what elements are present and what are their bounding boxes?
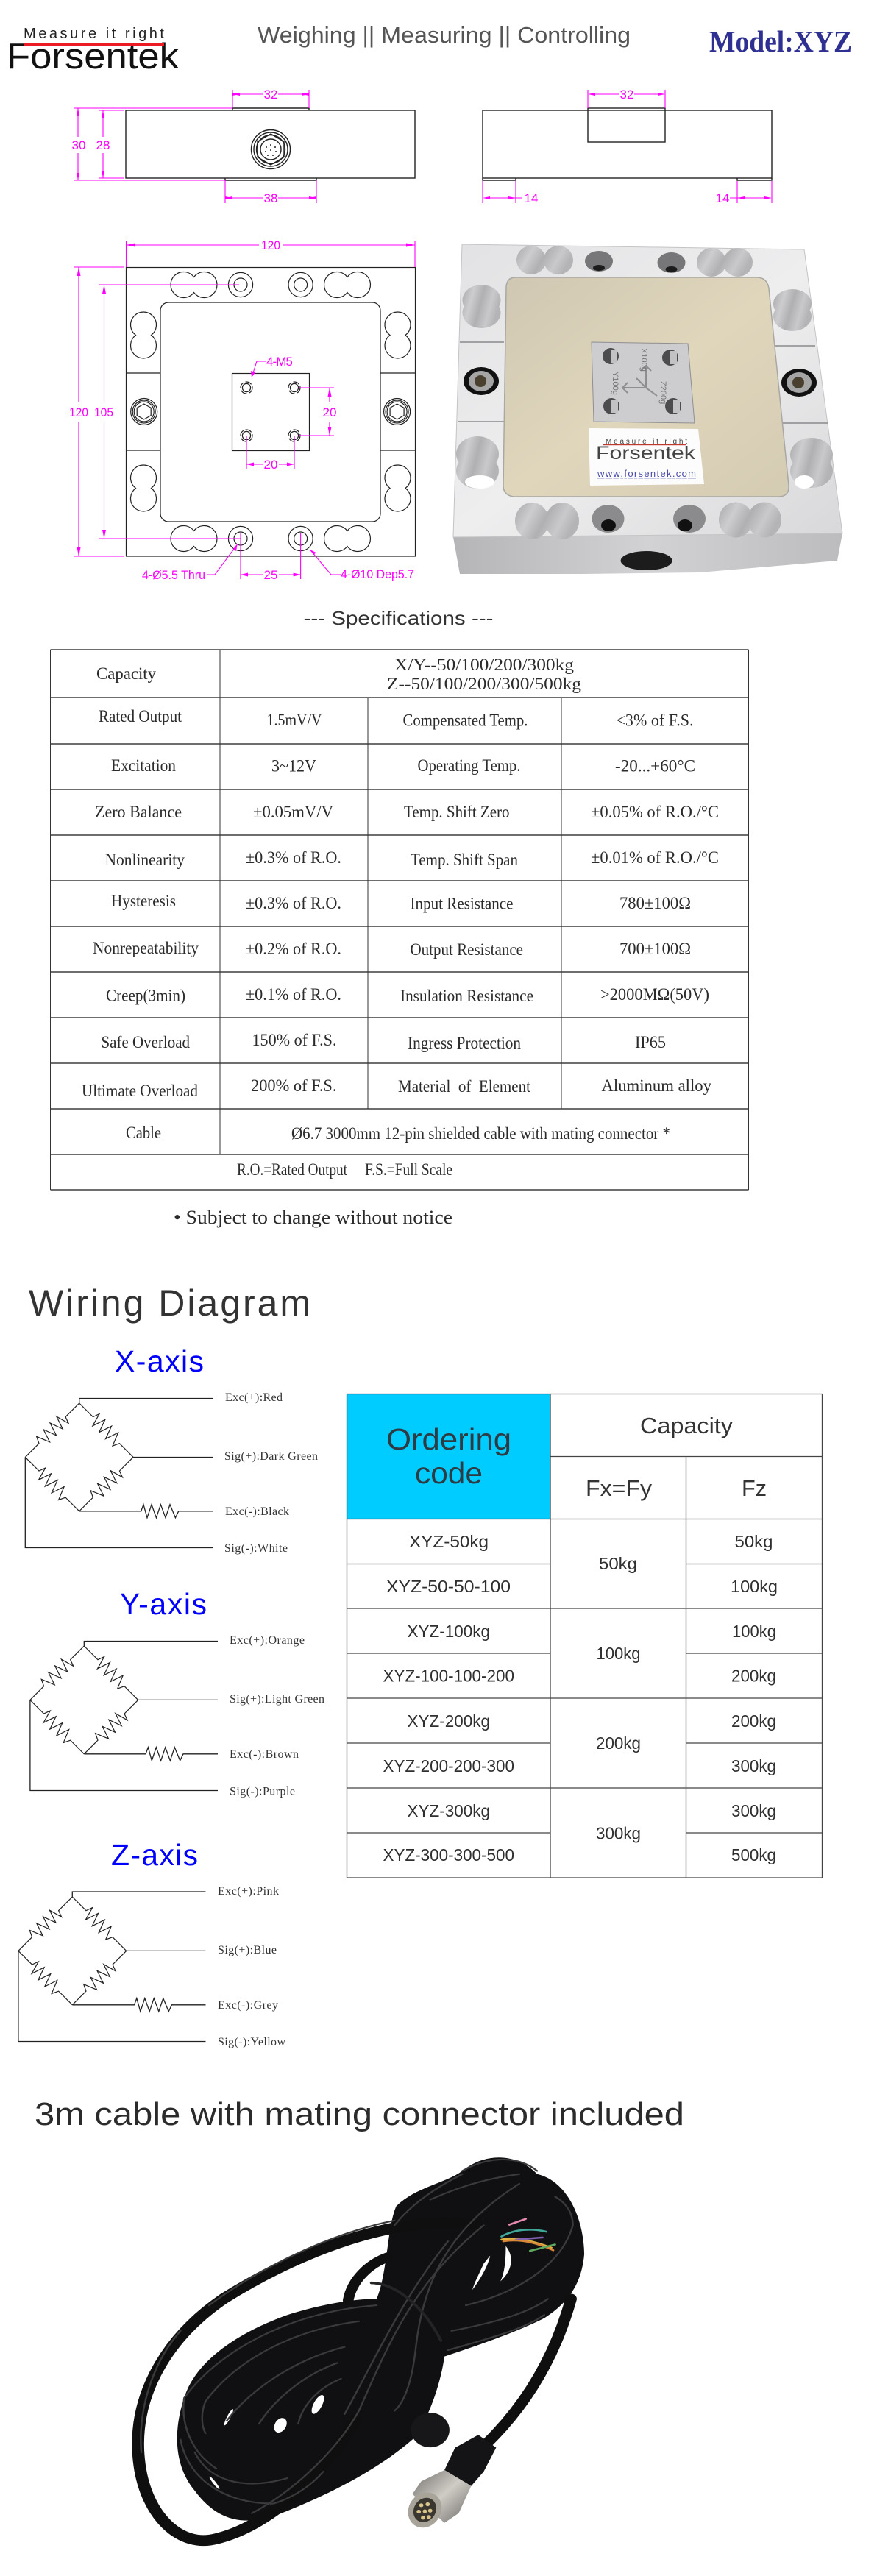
- row: rated output: 1.5mV/V: [266, 711, 322, 729]
- M5 threaded holes: [241, 382, 300, 441]
- Z-axis wire labels: Sig(-):Yellow: [218, 2036, 285, 2048]
- column: Fz: 200kg: [731, 1711, 776, 1731]
- column: ordering codes: [383, 1532, 514, 1864]
- photo: center plate: [592, 342, 695, 423]
- row: hysteresis: Hysteresis: [111, 892, 176, 910]
- row: safe overload: Safe Overload: [102, 1033, 190, 1051]
- specifications table: [50, 650, 749, 1190]
- Z-axis wire labels: Sig(+):Blue: [218, 1944, 277, 1956]
- dimensions: plan view: 120: [69, 405, 88, 419]
- photo: brand sticker: [589, 428, 704, 486]
- row: nonlinearity: Temp. Shift Span: [411, 851, 518, 869]
- cable photo: [138, 2157, 584, 2541]
- row: ultimate overload: Material of Element: [398, 1077, 531, 1096]
- photo: threaded holes and screws: [464, 251, 817, 533]
- column: Fz: 300kg: [731, 1801, 776, 1820]
- photo: center plate: Z200g: [658, 381, 667, 404]
- row: hysteresis: 780±100Ω: [619, 894, 691, 912]
- connector with dust cap: [402, 2413, 496, 2532]
- row: capacity: [96, 656, 582, 693]
- dimensions: plan view: 25: [264, 568, 277, 582]
- row: nonrepeatability: 700±100Ω: [619, 940, 691, 958]
- column: Fz: [731, 1532, 778, 1864]
- dimensions: plan view: [69, 238, 415, 582]
- row: ultimate overload: Ultimate Overload: [82, 1082, 198, 1100]
- Y-axis wire labels: Exc(-):Brown: [230, 1748, 299, 1761]
- table grid: [347, 1394, 823, 1878]
- column: Fz: 500kg: [731, 1845, 776, 1864]
- row: ultimate overload: 200% of F.S.: [251, 1076, 337, 1095]
- Z-axis wire labels: Exc(+):Pink: [218, 1885, 279, 1898]
- row: rated output: <3% of F.S.: [617, 711, 693, 730]
- row: excitation: Excitation: [111, 756, 176, 775]
- socket head screws: [131, 399, 411, 425]
- side view drawing: front: [72, 88, 415, 205]
- Y-axis wire labels: Sig(+):Light Green: [230, 1693, 324, 1706]
- row: rated output: Compensated Temp.: [403, 711, 528, 730]
- wiring: Z-axis: Z-axis: [111, 1838, 198, 1872]
- dimensions: plan view: 4-Ø10 Dep5.7: [341, 567, 414, 581]
- row: nonrepeatability: ±0.2% of R.O.: [246, 940, 341, 958]
- row: zero balance: Temp. Shift Zero: [404, 803, 509, 821]
- mounting lobes: [131, 272, 411, 552]
- row: cable: [126, 1124, 670, 1143]
- ordering code table: [347, 1394, 823, 1878]
- dimensions: front view: [74, 90, 316, 203]
- row: excitation: -20...+60°C: [615, 756, 695, 776]
- row: zero balance: [95, 803, 719, 821]
- photo: lobes: [456, 246, 833, 539]
- side view drawing: rear: [483, 88, 772, 205]
- side view drawing: front: 32: [264, 88, 277, 102]
- row: abbreviations: F.S.=Full Scale: [365, 1160, 452, 1179]
- row: creep: >2000MΩ(50V): [600, 985, 709, 1004]
- X-axis wire labels: Sig(+):Dark Green: [224, 1450, 318, 1463]
- row: creep: [106, 985, 709, 1005]
- row: safe overload: 150% of F.S.: [252, 1031, 337, 1049]
- side view drawing: front: 38: [264, 191, 277, 205]
- footnote: • Subject to change without notice: [174, 1207, 452, 1228]
- row: safe overload: IP65: [635, 1033, 666, 1051]
- column: Fz: 300kg: [731, 1756, 776, 1775]
- header cells: capacity: [586, 1413, 767, 1501]
- dimensions: plan view: 105: [94, 405, 113, 419]
- dimensions: rear view: [483, 90, 772, 203]
- cable strands: [138, 2223, 571, 2541]
- row: cable: Ø6.7 3000mm 12-pin shielded cable with mating connector *: [291, 1124, 670, 1143]
- column: ordering codes: XYZ-100kg: [408, 1622, 490, 1641]
- row: hysteresis: Input Resistance: [411, 895, 514, 912]
- photo: cable socket: [621, 551, 672, 570]
- product photo: load cell: [453, 244, 842, 574]
- wiring: X-axis: X-axis: [115, 1344, 204, 1378]
- row: zero balance: ±0.05mV/V: [253, 803, 333, 821]
- row: zero balance: ±0.05% of R.O./°C: [591, 803, 719, 821]
- row: safe overload: [102, 1031, 666, 1052]
- wiring: Y-axis: Y-axis: [120, 1587, 207, 1621]
- column: Fx=Fy: 300kg: [596, 1823, 641, 1842]
- row: abbreviations: [237, 1160, 452, 1179]
- header cell: ordering code: [347, 1394, 550, 1519]
- row: ultimate overload: [82, 1076, 711, 1100]
- Y-axis wire labels: Sig(-):Purple: [230, 1785, 295, 1798]
- row: nonlinearity: Nonlinearity: [104, 851, 185, 869]
- cable section heading: 3m cable with mating connector included: [35, 2096, 684, 2132]
- row: excitation: [111, 756, 695, 776]
- row: ultimate overload: Aluminum alloy: [602, 1076, 711, 1095]
- column: Fz: 100kg: [731, 1577, 778, 1596]
- Y-axis wire labels: [230, 1634, 324, 1798]
- row: nonlinearity: ±0.3% of R.O.: [246, 848, 341, 867]
- column: ordering codes: XYZ-50kg: [409, 1532, 489, 1551]
- header cells: capacity: Fx=Fy: [586, 1475, 653, 1501]
- row: creep: Creep(3min): [106, 986, 185, 1005]
- row: hysteresis: ±0.3% of R.O.: [246, 894, 341, 912]
- wiring: Y-axis: [26, 1587, 324, 1798]
- wiring diagram heading: Wiring Diagram: [29, 1282, 310, 1324]
- row: capacity: X/Y--50/100/200/300kg: [394, 656, 575, 674]
- row: nonrepeatability: Output Resistance: [411, 940, 523, 959]
- specifications heading: --- Specifications ---: [303, 607, 493, 629]
- header cells: capacity: Fz: [742, 1475, 767, 1501]
- photo: tan top plate: [503, 277, 789, 497]
- cable gaps: [208, 2246, 511, 2490]
- column: ordering codes: XYZ-50-50-100: [386, 1577, 511, 1596]
- X-axis wire labels: [224, 1391, 318, 1555]
- dimensions: plan view: 120: [261, 238, 280, 252]
- column: Fz: 200kg: [731, 1666, 776, 1685]
- side view drawing: rear: 14: [525, 191, 538, 205]
- row: creep: ±0.1% of R.O.: [246, 985, 341, 1004]
- dimensions: plan view: 20: [323, 405, 336, 419]
- wiring: X-axis: [21, 1344, 318, 1555]
- header cells: capacity: Capacity: [640, 1413, 734, 1438]
- wiring: Z-axis: [14, 1838, 285, 2048]
- side view drawing: rear: 32: [620, 88, 633, 102]
- column: ordering codes: XYZ-100-100-200: [383, 1666, 514, 1685]
- column: ordering codes: XYZ-300-300-500: [383, 1845, 514, 1864]
- column: ordering codes: XYZ-200-200-300: [383, 1756, 514, 1775]
- row: hysteresis: [111, 892, 691, 912]
- side view drawing: front: 30: [72, 138, 85, 152]
- column: Fz: 100kg: [732, 1622, 776, 1641]
- photo: brand sticker: Measure it right: [606, 438, 687, 446]
- plan view drawing: [69, 238, 415, 582]
- photo: brand sticker: Forsentek: [596, 443, 696, 464]
- row: capacity: Z--50/100/200/300/500kg: [387, 675, 582, 693]
- header cell: ordering code: Ordering: [386, 1422, 511, 1456]
- row: safe overload: Ingress Protection: [408, 1034, 521, 1052]
- logo: Forsentek: Forsentek: [7, 37, 180, 77]
- row: nonlinearity: ±0.01% of R.O./°C: [591, 848, 719, 867]
- row: cable: Cable: [126, 1124, 161, 1142]
- side view drawing: rear: 14: [716, 191, 729, 205]
- X-axis wire labels: Exc(-):Black: [225, 1505, 289, 1518]
- photo: center plate: X100g: [639, 348, 648, 372]
- row: zero balance: Zero Balance: [95, 803, 182, 821]
- Z-axis bridge schematic: [14, 1892, 206, 2041]
- cable coil mass: [177, 2157, 584, 2521]
- row: abbreviations: R.O.=Rated Output: [237, 1160, 348, 1179]
- row: nonrepeatability: [93, 939, 691, 959]
- row: nonlinearity: [104, 848, 719, 869]
- photo: brand sticker: www.forsentek.com: [597, 468, 696, 479]
- model title: Model:XYZ: [709, 24, 852, 58]
- row: creep: Insulation Resistance: [400, 987, 533, 1005]
- tagline: Weighing || Measuring || Controlling: [258, 22, 631, 48]
- row: rated output: Rated Output: [99, 707, 182, 725]
- row: capacity: Capacity: [96, 664, 156, 683]
- column: Fx=Fy: [596, 1554, 641, 1842]
- Z-axis wire labels: [218, 1885, 285, 2048]
- body side and top faces: [453, 244, 842, 574]
- photo: center plate: Y100g: [611, 372, 619, 395]
- column: Fx=Fy: 100kg: [596, 1644, 640, 1663]
- row: nonrepeatability: Nonrepeatability: [93, 939, 199, 957]
- row: excitation: Operating Temp.: [418, 756, 521, 775]
- column: Fx=Fy: 50kg: [599, 1554, 637, 1573]
- X-axis wire labels: Sig(-):White: [224, 1542, 288, 1555]
- side view drawing: front: 28: [96, 138, 110, 152]
- cable highlights: [141, 2160, 573, 2513]
- row: excitation: 3~12V: [271, 756, 316, 776]
- header cell: ordering code: code: [415, 1456, 483, 1490]
- column: Fz: 50kg: [734, 1532, 773, 1551]
- column: ordering codes: XYZ-300kg: [408, 1801, 490, 1820]
- Z-axis wire labels: Exc(-):Grey: [218, 1999, 278, 2012]
- counterbored holes: [228, 272, 313, 551]
- X-axis bridge schematic: [21, 1398, 213, 1548]
- Y-axis bridge schematic: [26, 1641, 218, 1791]
- row: rated output: [99, 707, 693, 730]
- column: Fx=Fy: 200kg: [596, 1734, 641, 1753]
- dimensions: plan view: 4-M5: [266, 355, 293, 369]
- table grid: [50, 650, 749, 1190]
- dimensions: plan view: 20: [264, 458, 277, 472]
- X-axis wire labels: Exc(+):Red: [225, 1391, 283, 1404]
- Y-axis wire labels: Exc(+):Orange: [230, 1634, 305, 1647]
- dimensions: plan view: 4-Ø5.5 Thru: [142, 568, 205, 582]
- column: ordering codes: XYZ-200kg: [408, 1711, 490, 1731]
- logo: Forsentek: Measure it right: [24, 26, 164, 42]
- colored bare wires: [502, 2219, 555, 2251]
